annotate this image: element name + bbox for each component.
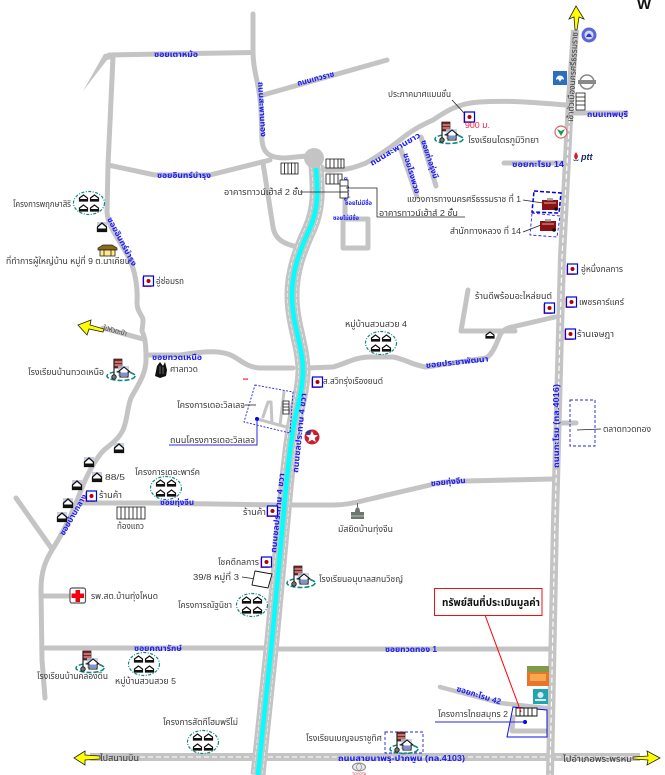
icon: shrine [155,362,167,378]
icon: mosque [351,503,364,519]
market boundary [570,400,601,446]
road labels: ซอยทุ่งจีน [430,474,466,488]
logo: star fuel station [304,430,320,444]
road labels: ซอยทุ่งจีน [160,496,194,507]
place labels: ไปหัวตะปำ [102,324,128,338]
highway to phra phrom [90,753,640,761]
place labels: ไปอำเภอพระพรหม [562,754,632,764]
the village internal roads [257,392,290,428]
place labels: โรงเรียนบ้านทวดเหนือ [28,367,104,377]
arrow: to Phra Phrom [633,751,660,765]
road labels: ซอยอินทร์บำรุง [157,171,211,180]
place labels: 39/8 หมู่ที่ 3 [193,571,239,583]
road labels: ซอยไม่มีชื่อ [345,198,372,207]
highway department buildings [530,191,561,237]
place labels: มัสยิดบ้านทุ่งจีน [338,524,393,534]
place labels: โครงการเดอะวิลเลจ [177,400,245,410]
house clusters [74,192,396,754]
road labels: ซอยประชาพัฒนา [425,353,489,370]
leader lines [242,100,543,580]
place labels: อู่หนึ่งกลการ [581,263,623,275]
place labels: โครงการไทยสมุทร 2 [438,709,508,719]
vacant plot 39/8 [252,571,272,588]
road labels: ซอยอินทร์บำรุง [105,216,139,268]
kaarom road [550,30,575,775]
logo: ptt: ptt [580,152,593,162]
place labels: ประภาคมาศแมนชั่น [388,89,451,99]
road labels: ถนนชลประทาน 4 ขวา [291,393,308,473]
place labels: ร้านค้า [243,507,266,517]
place labels: ที่ทำการผู้ใหญ่บ้าน หมู่ที่ 9 ต.นาเคียน [6,255,130,267]
place labels: ร้านดีพร้อมอะไหล่ยนต์ [475,291,552,301]
panel: the village boundary and leader [169,378,293,445]
place labels: ท้องแถว [117,521,144,531]
road labels: ถนนกะโรม (ทล.4016) [552,384,561,468]
subject property boundary [435,707,547,737]
place labels: อาคารทาวน์เฮ้าส์ 2 ชั้น [224,187,303,197]
road labels: ซอยไม่มีชื่อ [333,213,359,222]
road labels: ถนนเทพบุรี [587,109,628,119]
road labels: ซอยเตาหม้อ [154,49,198,59]
place labels: โครงการณัฐนิชา [178,600,232,610]
road labels: ถนนสะพานทอง [256,82,268,137]
place labels: ศาลทวด [170,364,198,374]
place labels: โรงเรียนไตรภูมิวิทยา [468,135,539,146]
logo: housing project orange [527,666,549,686]
place labels: ร้านเจษฎา [577,329,614,339]
road labels: ซอยท่าอรุ่งมี [419,138,442,180]
place labels: 900 ม. [465,120,490,130]
shop markers [86,112,578,568]
place labels: สำนักทางหลวง ที่ 14 [450,225,521,236]
road labels: ซอยกะโรม 14 [512,160,565,169]
road labels: ซอยทวดทอง 1 [385,645,438,654]
place labels: อู่ซ่อมรถ [156,276,184,287]
logo: Kasikorn bank [555,126,567,138]
logo: Toyota [352,763,367,775]
logo: Nissan [578,75,596,89]
place labels: รพ.สต.บ้านทุ่งโหนด [91,591,158,601]
place labels: ถนนโครงการเดอะวิลเลจ [170,435,255,445]
road labels: ซอยไม่มีชื่อ [342,177,351,201]
place labels: ตลาดทวดทอง [603,424,651,434]
logo: housing project teal [533,689,548,704]
logo: Krungthai bank [553,71,567,85]
logo: ptt [573,152,593,162]
road labels: ซอยทวดเหนือ [152,352,202,362]
buildings: hatched townhouses [117,93,585,519]
arrow: north to Nakhon Si Thammarat [569,6,584,30]
place labels: โครงการพฤกษาสิริ [13,199,71,209]
place labels: โรงเรียนเบญจมราชูทิศ [306,733,382,744]
place labels: เพชรคาร์แคร์ [579,297,624,307]
place labels: ร้านค้า [99,490,122,500]
road labels: เข้าตัวเมืองนครศรีธรรมราช [565,31,580,122]
road labels: ซอยคณารักษ์ [134,643,183,653]
road labels: ซอยโรงพวย [401,152,422,195]
place labels: ส.สวิทรุ่งเรืองยนต์ [323,376,383,386]
arrow: to Hua Hin [78,320,104,335]
logo: Bangkok round seal [582,28,596,42]
place labels: ไปสนามบิน [99,753,139,763]
place labels: โรงเรียนอนุบาลสกนวิชญ์ [319,574,403,584]
callout: subject property [434,588,542,712]
icon: hospital [70,588,86,603]
icon: village headman office [98,245,117,256]
place labels: โครงการสัตกีโฮมพรีไม่ [163,717,238,727]
place labels: หมู่บ้านสวนสวย 5 [115,676,176,687]
road labels: ซอยกะโรม 42 [455,684,503,707]
kanlaprathan main road [258,148,324,775]
place labels: โครงการเดอะพาร์ค [135,467,200,477]
road labels: ถนนสะพานยาว [368,131,422,168]
place labels: หมู่บ้านสวนสวย 4 [345,319,407,330]
place labels: โรงเรียนบ้านคลองดิน [37,671,108,681]
place labels: แขวงการทางนครศรีธรรมราช ที่ 1 [407,193,521,204]
place labels: โชคดีกลการ [218,557,259,567]
road labels: ถนนเทวราช [296,69,335,88]
school icons [76,122,463,754]
road labels: ถนนชลประทาน 4 ขวา [269,473,286,553]
place labels: 88/5 [105,472,125,482]
callout: subject property: ทรัพย์สินที่ประเมินมูลค่า [442,595,540,609]
arrow: to airport [74,751,100,765]
road labels: ถนนสายนาพรุ-ปากพูน (ทล.4103) [338,754,465,763]
place labels: อาคารทาวน์เฮ้าส์ 2 ชั้น [379,208,458,218]
road labels: ซอยบ้านกลาง [57,492,89,537]
single houses [57,222,494,522]
